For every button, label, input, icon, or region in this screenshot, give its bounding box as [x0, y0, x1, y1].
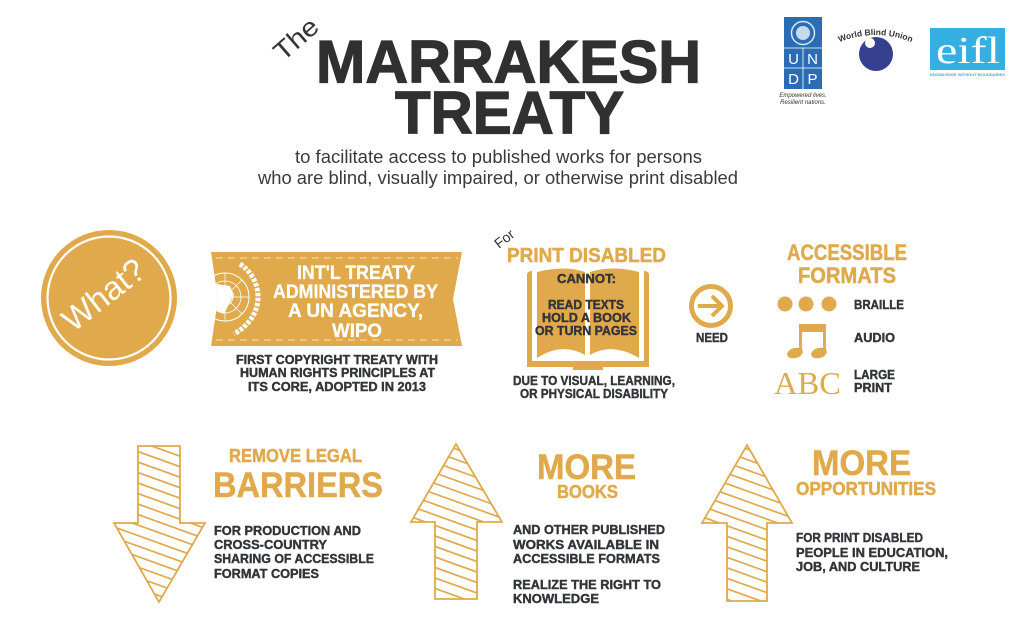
logo: UNDP: P: [807, 71, 818, 88]
heading: more books: MORE: [537, 448, 636, 487]
heading: more books: BOOKS: [557, 482, 618, 502]
heading: more opportunities: MORE: [812, 444, 911, 483]
badge: What?: [41, 230, 177, 366]
icon: UN emblem: [214, 262, 260, 336]
icon: ABC: ABC: [774, 365, 841, 401]
text: production and sharing: [214, 524, 374, 581]
subtitle: [257, 147, 738, 188]
text: published works: [513, 523, 665, 606]
text: first copyright treaty: HUMAN RIGHTS PRINCIPLES AT: [240, 366, 435, 380]
logo: eifl: KNOWLEDGE WITHOUT BOUNDARIES: [930, 72, 1005, 77]
text: published works: WORKS AVAILABLE IN: [513, 538, 659, 552]
text: print disabled people: [796, 531, 948, 574]
text: published works: AND OTHER PUBLISHED: [513, 523, 665, 537]
text: first copyright treaty: ITS CORE, ADOPTED IN 2013: [248, 380, 426, 394]
icon: music note: [786, 324, 828, 360]
subtitle: to facilitate access to published works for persons: [295, 147, 702, 167]
icon: open book: [527, 268, 649, 370]
icon: braille dots: [778, 296, 836, 312]
logo: UNDP: D: [788, 71, 799, 88]
label: audio: AUDIO: [854, 331, 895, 345]
logo: UNDP: [779, 17, 827, 106]
title: The: The: [267, 11, 325, 67]
logo: eifl: [930, 28, 1005, 77]
text: production and sharing: FORMAT COPIES: [214, 567, 319, 581]
text: print disabled people: JOB, AND CULTURE: [796, 560, 920, 574]
heading: accessible formats: FORMATS: [798, 263, 896, 288]
heading: for print disabled: For: [491, 226, 518, 251]
title: Treaty: TREATY: [395, 80, 624, 146]
text: cannot: [535, 272, 637, 338]
arrow: up opportunities: [700, 443, 794, 602]
ribbon text: ADMINISTERED BY: [273, 281, 438, 303]
text: production and sharing: SHARING OF ACCESSIBLE: [214, 552, 374, 566]
logo: World Blind Union: [838, 28, 912, 71]
logo: UNDP: U: [788, 51, 799, 68]
heading: for print disabled: PRINT DISABLED: [507, 245, 666, 267]
logo: eifl: eifl: [936, 30, 1000, 72]
text: published works: ACCESSIBLE FORMATS: [513, 552, 660, 566]
text: published works: KNOWLEDGE: [513, 592, 599, 606]
logo: World Blind Union: World Blind Union: [838, 28, 912, 42]
text: cannot: CANNOT:: [557, 272, 616, 286]
heading: for print disabled: [491, 226, 666, 267]
logo: UNDP: Empowered lives.: [779, 93, 827, 99]
text: production and sharing: CROSS-COUNTRY: [214, 538, 328, 552]
ribbon text: WIPO: [332, 320, 382, 342]
text: first copyright treaty: FIRST COPYRIGHT TREATY WITH: [236, 353, 438, 367]
title: [267, 11, 701, 147]
title: Marrakesh: MARRAKESH: [316, 28, 701, 96]
ribbon text: A UN AGENCY,: [288, 300, 423, 322]
badge: What?: What?: [55, 251, 152, 339]
ribbon text: INT'L TREATY: [297, 262, 415, 284]
text: cannot: HOLD A BOOK: [542, 311, 631, 325]
text: due to disability: DUE TO VISUAL, LEARNING,: [513, 374, 675, 388]
heading: remove legal barriers: BARRIERS: [213, 466, 383, 505]
ribbon: international treaty: [201, 252, 462, 346]
text: due to disability: [513, 374, 675, 401]
text: cannot: OR TURN PAGES: [535, 324, 637, 338]
text: cannot: READ TEXTS: [548, 298, 624, 312]
text: print disabled people: FOR PRINT DISABLED: [796, 531, 923, 545]
label: large print: [854, 368, 895, 395]
label: need: NEED: [696, 331, 728, 345]
heading: more opportunities: [796, 444, 936, 499]
logo: UNDP: Resilient nations.: [780, 100, 826, 106]
arrow: down: [112, 445, 206, 604]
label: braille: BRAILLE: [854, 298, 904, 312]
text: production and sharing: FOR PRODUCTION AND: [214, 524, 361, 538]
heading: accessible formats: [787, 240, 907, 288]
label: large print: LARGE: [854, 368, 895, 382]
heading: more opportunities: OPPORTUNITIES: [796, 479, 936, 499]
heading: remove legal barriers: REMOVE LEGAL: [229, 446, 362, 466]
heading: accessible formats: ACCESSIBLE: [787, 240, 907, 265]
heading: remove legal barriers: [213, 446, 383, 505]
label: large print: PRINT: [854, 381, 892, 395]
text: due to disability: OR PHYSICAL DISABILITY: [520, 387, 669, 401]
logo: UNDP: N: [807, 51, 818, 68]
text: print disabled people: PEOPLE IN EDUCATION,: [796, 546, 948, 560]
arrow: up books: [410, 442, 504, 600]
heading: more books: [537, 448, 636, 502]
text: published works: REALIZE THE RIGHT TO: [513, 578, 661, 592]
text: first copyright treaty: [236, 353, 438, 394]
ribbon text: [273, 262, 438, 342]
subtitle: who are blind, visually impaired, or otherwise print disabled: [257, 168, 738, 188]
icon: need arrow: [692, 286, 730, 326]
